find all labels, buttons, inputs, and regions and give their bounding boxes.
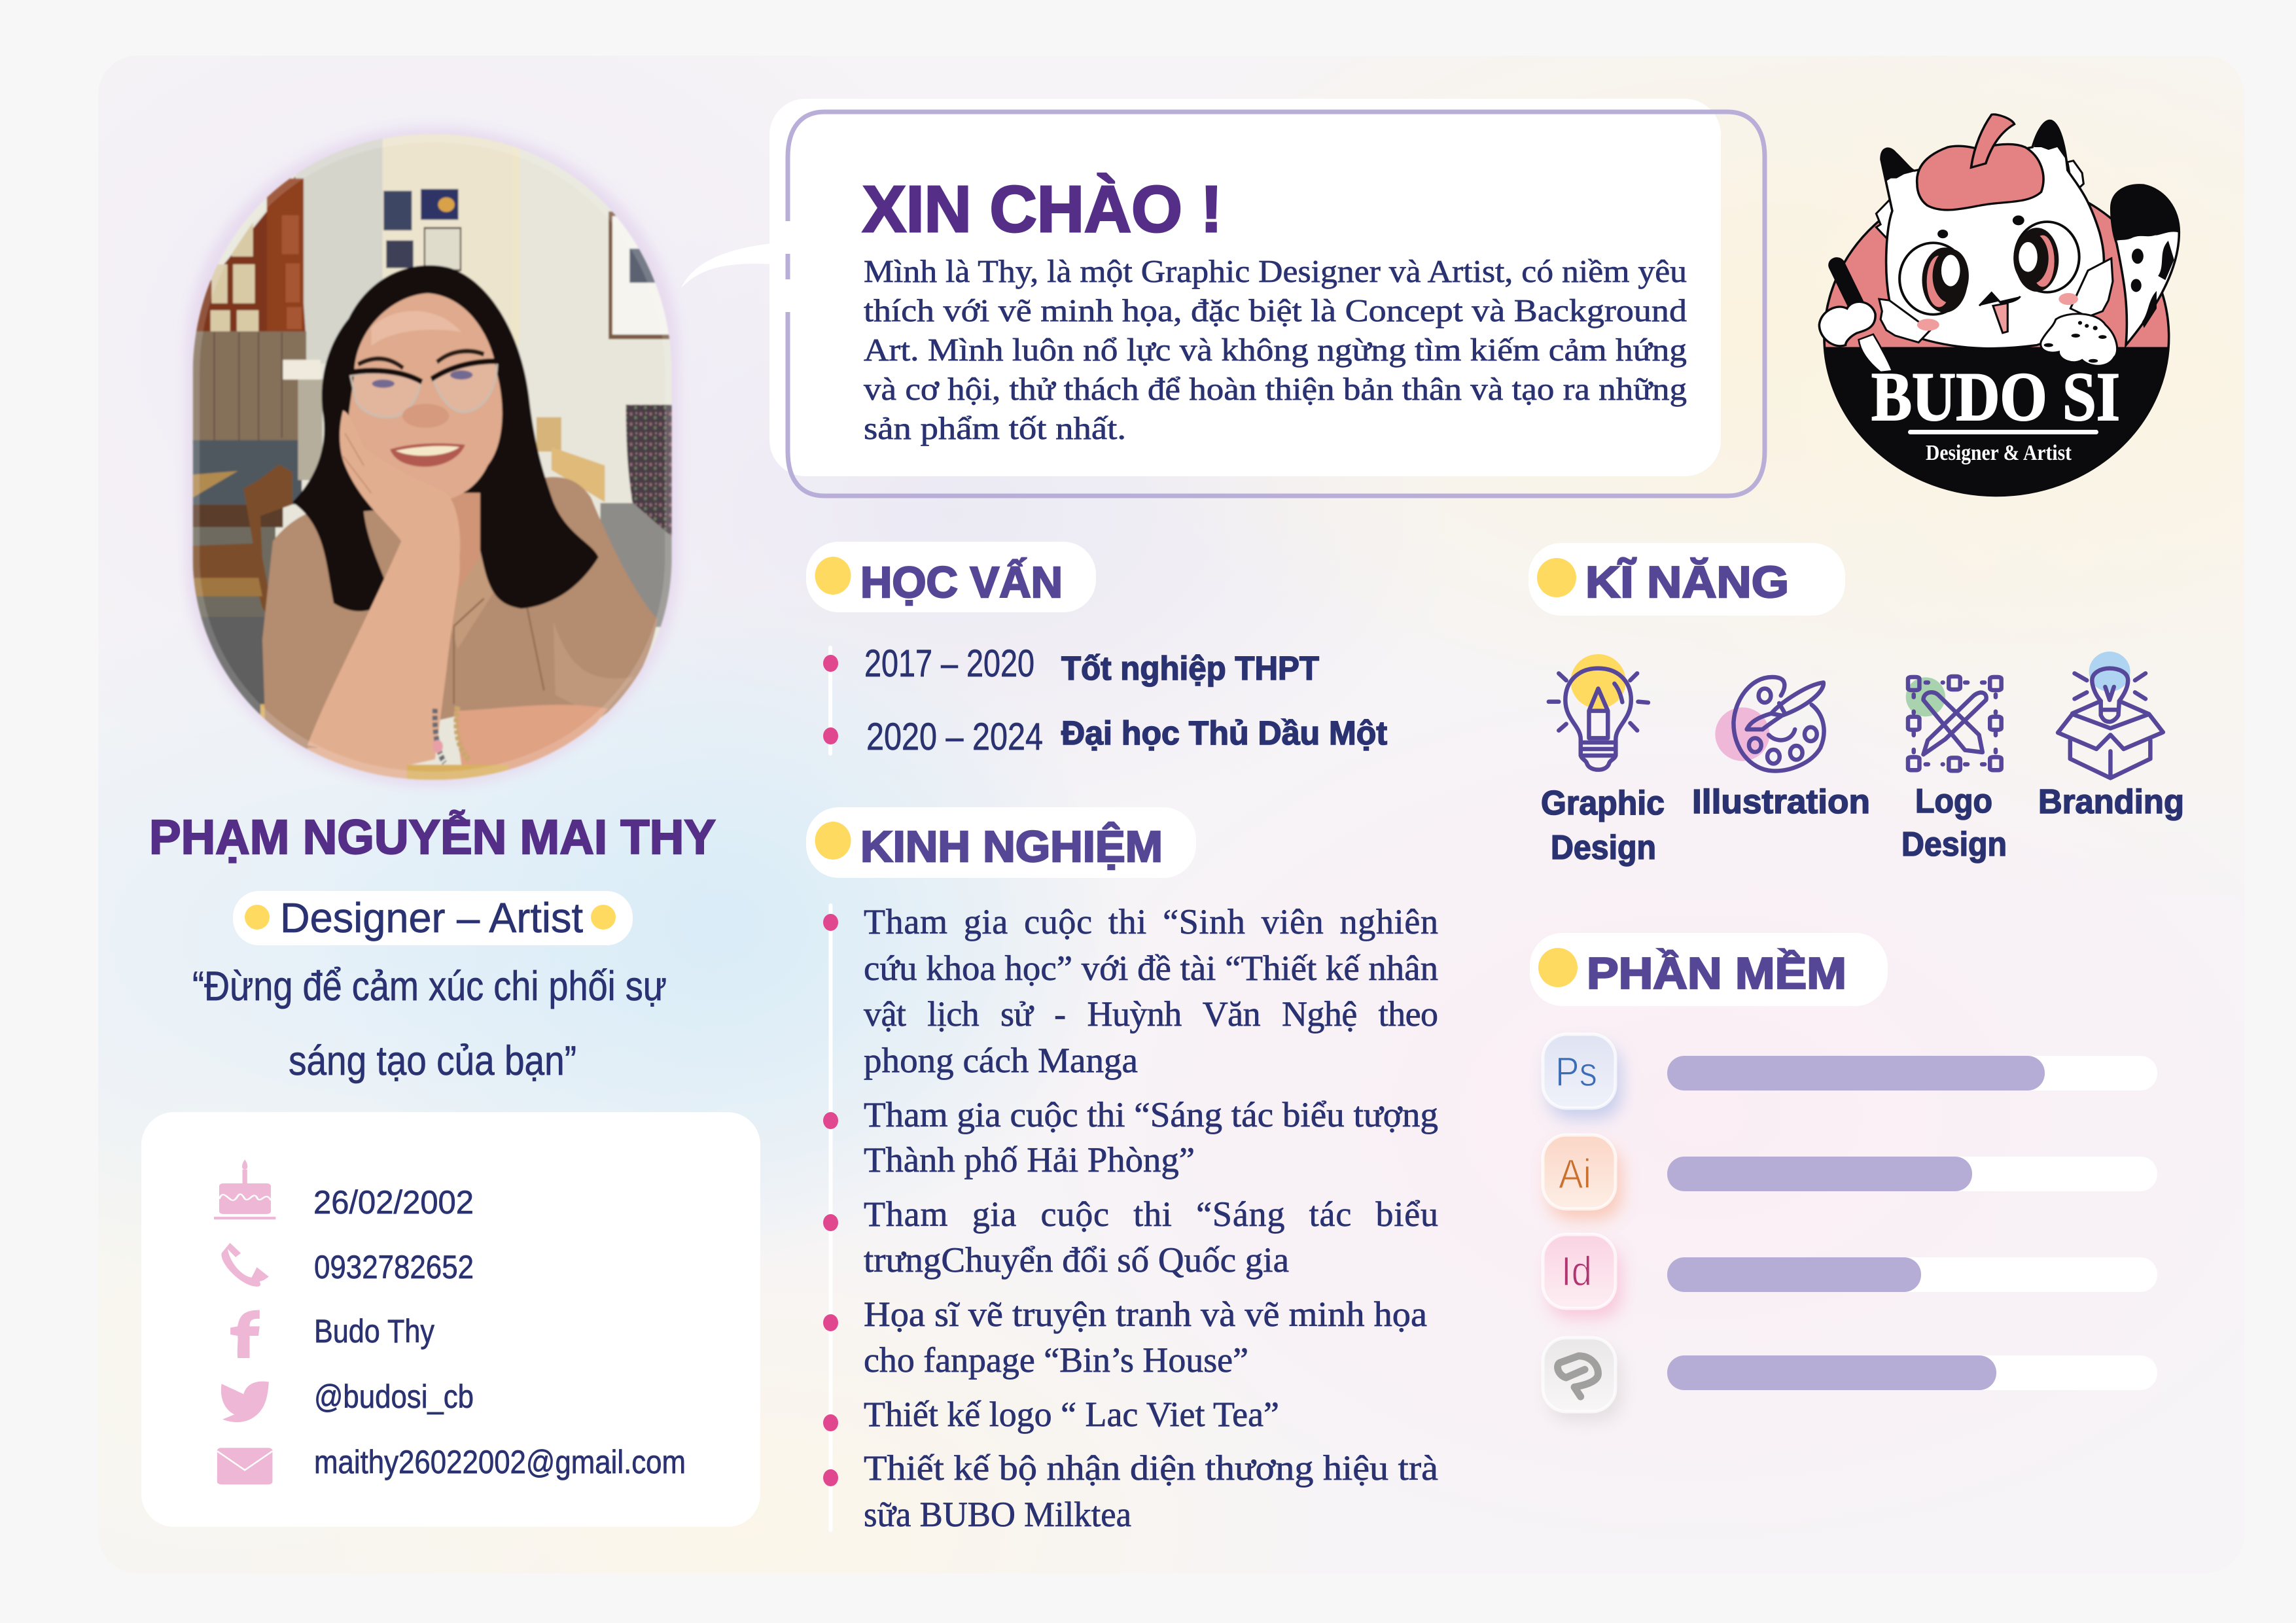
software: InDesign: Id — [1561, 1249, 1592, 1295]
software: Photoshop: Ps — [1555, 1049, 1597, 1095]
icon: twitter — [221, 1382, 269, 1422]
arm and hand — [308, 410, 460, 765]
intro text — [864, 253, 1687, 446]
glasses — [351, 362, 497, 417]
intro text: và cơ hội, thử thách để hoàn thiện bản thân và tạo ra những — [864, 371, 1687, 407]
section: education — [806, 542, 1387, 758]
glass bevel — [193, 134, 672, 780]
icon: logo design pencils — [1906, 676, 2002, 771]
experience item 6 — [864, 1448, 1438, 1534]
experience item 4: Họa sĩ vẽ truyện tranh và vẽ minh họa — [864, 1295, 1427, 1334]
tail — [2111, 185, 2179, 345]
software: Photoshop — [1543, 1034, 2157, 1119]
experience item 5: Thiết kế logo “ Lac Viet Tea” — [864, 1395, 1279, 1434]
skill label: graphic design: Design — [1551, 829, 1656, 867]
skill label: illustration: Illustration — [1692, 783, 1870, 821]
contact: facebook: Budo Thy — [314, 1313, 434, 1350]
logo: Budo Si — [1819, 114, 2179, 499]
skill label: graphic design — [1541, 784, 1665, 867]
skill label: graphic design: Graphic — [1541, 784, 1665, 822]
right paw — [2041, 314, 2117, 366]
icon: illustration palette — [1715, 677, 1824, 771]
feather tufts — [1876, 161, 2083, 238]
nose and smile — [402, 404, 449, 428]
greeting heading: XIN CHÀO ! — [862, 173, 1222, 246]
hair — [292, 266, 599, 611]
role pill: Designer – Artist — [280, 894, 583, 941]
experience item 3: trưngChuyển đổi số Quốc gia — [864, 1240, 1289, 1280]
skill label: logo design: Logo — [1915, 782, 1992, 820]
experience item 6: Thiết kế bộ nhận diện thương hiệu trà — [864, 1448, 1438, 1488]
logo title: BUDO SI — [1871, 358, 2120, 435]
experience item 4: cho fanpage “Bin’s House” — [864, 1340, 1248, 1380]
education years 2017: 2017 – 2020 — [864, 642, 1034, 685]
experience item 1: phong cách Manga — [864, 1041, 1138, 1080]
software heading: PHẦN MỀM — [1587, 948, 1846, 998]
bracelets — [435, 708, 444, 763]
photo frame — [193, 134, 672, 780]
intro text: Mình là Thy, là một Graphic Designer và Artist, có niềm yêu — [864, 253, 1687, 289]
education high school: Tốt nghiệp THPT — [1061, 650, 1319, 687]
software heading — [1530, 933, 1888, 1006]
skills heading: KĨ NĂNG — [1585, 557, 1789, 607]
software: Clip Studio — [1543, 1338, 2157, 1421]
eyes — [1899, 243, 1967, 315]
intro text: Art. Mình luôn nổ lực và không ngừng tìm kiếm cảm hứng — [864, 332, 1687, 368]
quote — [192, 964, 667, 1084]
experience item 6: sữa BUBO Milktea — [864, 1495, 1131, 1534]
wing feathers — [1879, 299, 1930, 342]
contact: email: maithy26022002@gmail.com — [314, 1444, 686, 1480]
experience item 1 — [864, 902, 1438, 1080]
education heading: HỌC VẤN — [860, 558, 1063, 607]
intro text: sản phẩm tốt nhất. — [864, 410, 1126, 446]
software: InDesign — [1543, 1234, 2157, 1318]
experience item 4 — [864, 1295, 1427, 1380]
quote: “Đừng để cảm xúc chi phối sự — [192, 964, 667, 1009]
icon: mail — [217, 1448, 272, 1484]
skill label: branding: Branding — [2038, 783, 2184, 821]
experience heading: KINH NGHIỆM — [860, 822, 1163, 871]
experience item 1: Tham gia cuộc thi “Sinh viên nghiên — [864, 902, 1438, 941]
skill label: logo design — [1901, 782, 2007, 864]
icon: birthday cake — [214, 1160, 275, 1219]
photo portrait — [193, 134, 676, 781]
section: skills — [1528, 543, 2184, 867]
icon: phone — [221, 1243, 269, 1287]
bubble tail — [681, 243, 772, 288]
section: software — [1530, 933, 2157, 1421]
experience item 1: vật lịch sử - Huỳnh Văn Nghệ theo — [864, 994, 1438, 1034]
education years 2020: 2020 – 2024 — [866, 716, 1043, 758]
experience item 2 — [864, 1095, 1438, 1179]
contact: twitter: @budosi_cb — [314, 1378, 474, 1415]
eyes and brows — [358, 358, 403, 368]
intro text: thích với vẽ minh họa, đặc biệt là Concept và Background — [864, 292, 1687, 328]
software: Illustrator: Ai — [1559, 1151, 1591, 1197]
contact: birthday: 26/02/2002 — [313, 1184, 474, 1221]
skills heading — [1528, 543, 1845, 616]
logo tagline: Designer & Artist — [1926, 441, 2072, 465]
role pill — [233, 891, 633, 945]
icon: graphic design bulb — [1549, 654, 1648, 770]
quote: sáng tạo của bạn” — [289, 1038, 576, 1084]
neck — [450, 491, 482, 586]
experience item 1: cứu khoa học” với đề tài “Thiết kế nhân — [864, 949, 1438, 988]
skill label: logo design: Design — [1901, 826, 2007, 864]
experience timeline — [823, 903, 838, 1532]
experience item 2: Tham gia cuộc thi “Sáng tác biểu tượng — [864, 1095, 1438, 1134]
education university: Đại học Thủ Dầu Một — [1061, 714, 1387, 752]
icon: branding box — [2058, 652, 2163, 778]
software: Illustrator — [1543, 1135, 2157, 1219]
brush and left paw — [1837, 265, 1865, 322]
experience item 2: Thành phố Hải Phòng” — [864, 1140, 1195, 1179]
icon: facebook — [230, 1310, 260, 1358]
education timeline — [823, 646, 838, 756]
brows, cheeks, mouth — [1937, 230, 1948, 238]
education heading — [806, 542, 1096, 612]
section: experience — [806, 807, 1438, 1534]
speech bubble — [681, 99, 1765, 496]
experience item 3 — [864, 1195, 1438, 1280]
name heading: PHẠM NGUYỄN MAI THY — [149, 810, 716, 864]
contact: phone: 0932782652 — [314, 1249, 474, 1285]
shirt — [262, 477, 658, 750]
face — [349, 293, 502, 501]
panel: contact — [141, 1112, 760, 1527]
beret — [1917, 144, 2043, 210]
experience item 3: Tham gia cuộc thi “Sáng tác biểu — [864, 1195, 1438, 1234]
experience heading — [806, 807, 1196, 878]
head — [1881, 120, 2104, 349]
ears — [1881, 148, 1914, 181]
